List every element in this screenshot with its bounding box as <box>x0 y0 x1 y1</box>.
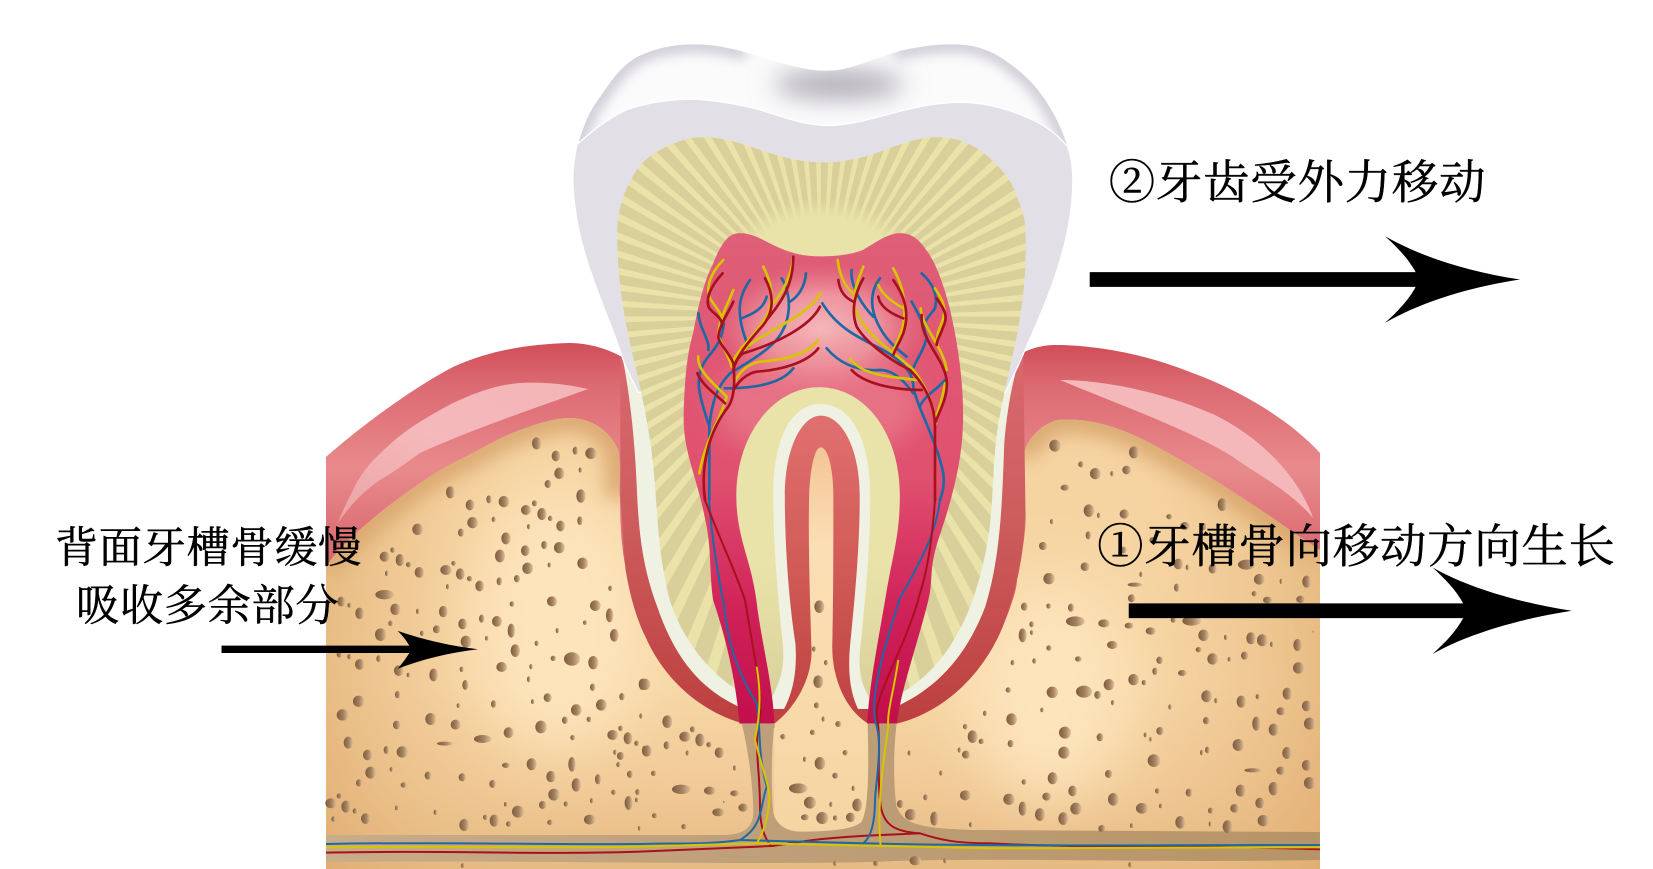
dental pulp <box>684 233 963 724</box>
periodontal ligament <box>620 359 1025 724</box>
yellow nerve lines <box>326 660 1320 848</box>
right gum <box>1000 345 1320 640</box>
root vessels between crown and apex <box>705 500 940 600</box>
red arteries <box>697 257 947 500</box>
red artery lines <box>326 600 1320 853</box>
labels and arrows <box>55 158 1616 669</box>
tooth body <box>573 44 1073 844</box>
inner dentin arch <box>736 387 900 709</box>
crown vessels and nerves <box>697 257 947 500</box>
blue veins <box>698 270 945 500</box>
alveolar bone <box>326 410 1320 869</box>
left gum <box>326 343 650 640</box>
bone pores: central block <box>639 600 987 866</box>
text: back alveolar bone slowly absorbs excess, line two: 吸收多余部分 <box>76 582 339 630</box>
dentin with radial rays <box>617 137 1026 698</box>
bone pores: left block <box>325 437 647 868</box>
cementum arch <box>766 404 878 709</box>
arrow: bone growth <box>1129 568 1572 654</box>
yellow nerves <box>698 257 947 473</box>
tan canal band and root canals <box>326 723 1320 863</box>
text: back alveolar bone slowly absorbs excess, line one: 背面牙槽骨缓慢 <box>55 524 362 572</box>
enamel <box>573 44 1073 392</box>
ligament arch <box>770 416 870 728</box>
arrow: bone resorption <box>222 631 478 669</box>
bone pores: right block <box>1003 440 1315 867</box>
cementum layer <box>622 353 1021 709</box>
root and canal vessels <box>326 600 1320 853</box>
blue vein lines <box>326 600 1320 845</box>
arrow: tooth movement <box>1090 236 1520 323</box>
text: tooth moves under external force: ②牙齿受外力移动 <box>1109 158 1486 209</box>
interradicular bone <box>774 447 868 844</box>
text: alveolar bone grows in direction of movement: ①牙槽骨向移动方向生长 <box>1097 522 1616 573</box>
